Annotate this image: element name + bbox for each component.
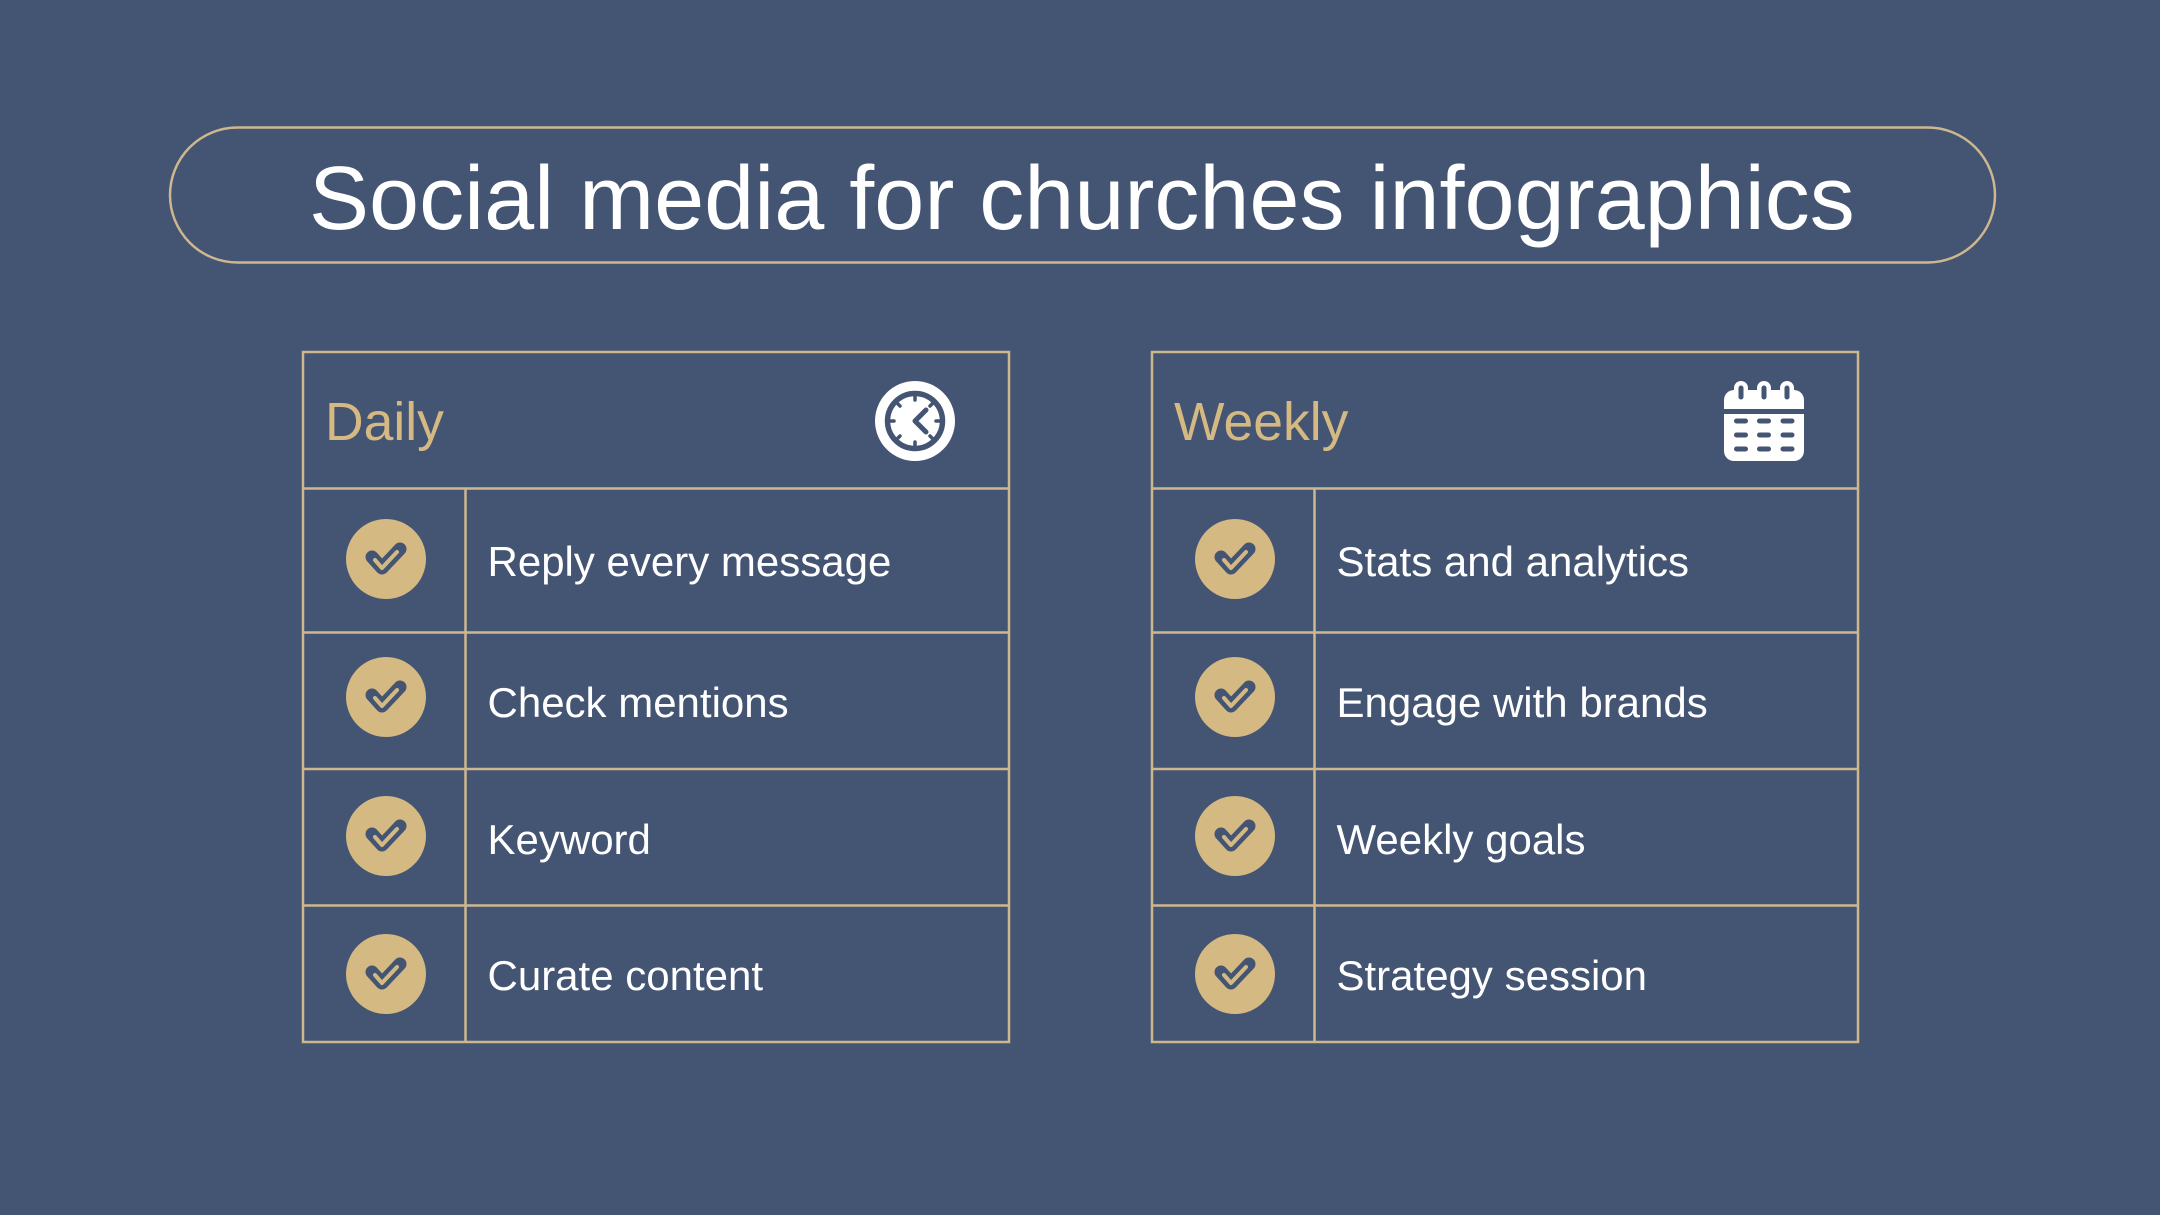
row: stats and analytics xyxy=(1195,519,1689,599)
row: weekly goals xyxy=(1195,796,1586,876)
row: strategy session: Strategy session xyxy=(1336,952,1647,999)
heading: daily: Daily xyxy=(325,393,444,452)
row: engage with brands xyxy=(1195,657,1708,737)
row: reply every message xyxy=(346,519,891,599)
panel: daily xyxy=(303,352,1009,1042)
title: Social media for churches infographics xyxy=(309,149,1855,249)
row: curate content: Curate content xyxy=(488,952,763,999)
title xyxy=(170,128,1995,262)
row: curate content xyxy=(346,934,763,1014)
row: reply every message: Reply every message xyxy=(488,538,891,585)
row: keyword: Keyword xyxy=(488,816,651,863)
row: check mentions: Check mentions xyxy=(488,679,789,726)
row: stats and analytics: Stats and analytics xyxy=(1336,538,1689,585)
icon: clock xyxy=(875,381,955,461)
row: engage with brands: Engage with brands xyxy=(1336,679,1708,726)
icon: calendar xyxy=(1724,381,1804,461)
heading: weekly: Weekly xyxy=(1174,393,1349,452)
panel: weekly xyxy=(1152,352,1858,1042)
row: keyword xyxy=(346,796,651,876)
row: strategy session xyxy=(1195,934,1647,1014)
row: check mentions xyxy=(346,657,789,737)
row: weekly goals: Weekly goals xyxy=(1336,816,1586,863)
